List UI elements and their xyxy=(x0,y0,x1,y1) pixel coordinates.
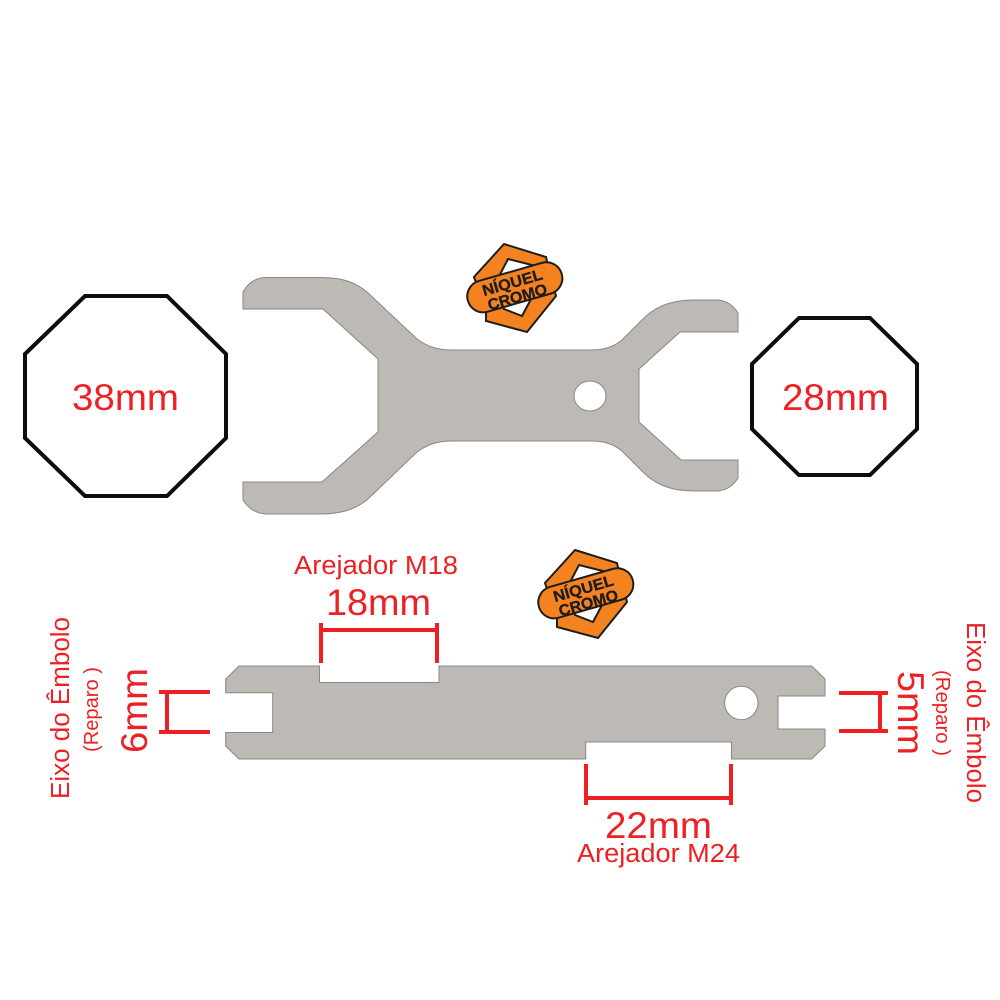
logo: Níquel Cromo (top): CROMO xyxy=(486,281,549,314)
label: 5mm: 5mm xyxy=(890,671,931,755)
dimension: 5mm xyxy=(839,693,888,731)
dimension: 22mm xyxy=(586,764,731,805)
label: Reparo (left): (Reparo ) xyxy=(81,667,103,752)
label: 22mm: 22mm xyxy=(605,805,712,846)
logo: Níquel Cromo (bottom): NÍQUEL xyxy=(551,573,616,606)
top wrench xyxy=(243,278,738,514)
logo: Níquel Cromo (top): NÍQUEL xyxy=(480,267,545,300)
label: Eixo do Êmbolo (right): Eixo do Êmbolo xyxy=(961,622,990,803)
label: Arejador M18: Arejador M18 xyxy=(294,552,458,580)
octagon: 28mm: 28mm xyxy=(782,377,889,418)
bottom wrench xyxy=(226,666,825,759)
label: Reparo (right): (Reparo ) xyxy=(931,670,953,756)
octagon: 38mm: 38mm xyxy=(72,377,179,418)
logo: Níquel Cromo (top) xyxy=(463,244,566,332)
dimension: 6mm xyxy=(159,692,210,732)
label: 6mm: 6mm xyxy=(114,668,155,753)
octagon: 28mm xyxy=(752,318,917,475)
label: 18mm: 18mm xyxy=(326,582,431,623)
dimension: 18mm xyxy=(321,623,437,663)
logo: Níquel Cromo (bottom): CROMO xyxy=(557,587,620,620)
label: Eixo do Êmbolo (left): Eixo do Êmbolo xyxy=(46,617,75,799)
label: Arejador M24: Arejador M24 xyxy=(577,840,740,868)
logo: Níquel Cromo (bottom) xyxy=(534,550,637,638)
octagon: 38mm xyxy=(25,296,226,496)
